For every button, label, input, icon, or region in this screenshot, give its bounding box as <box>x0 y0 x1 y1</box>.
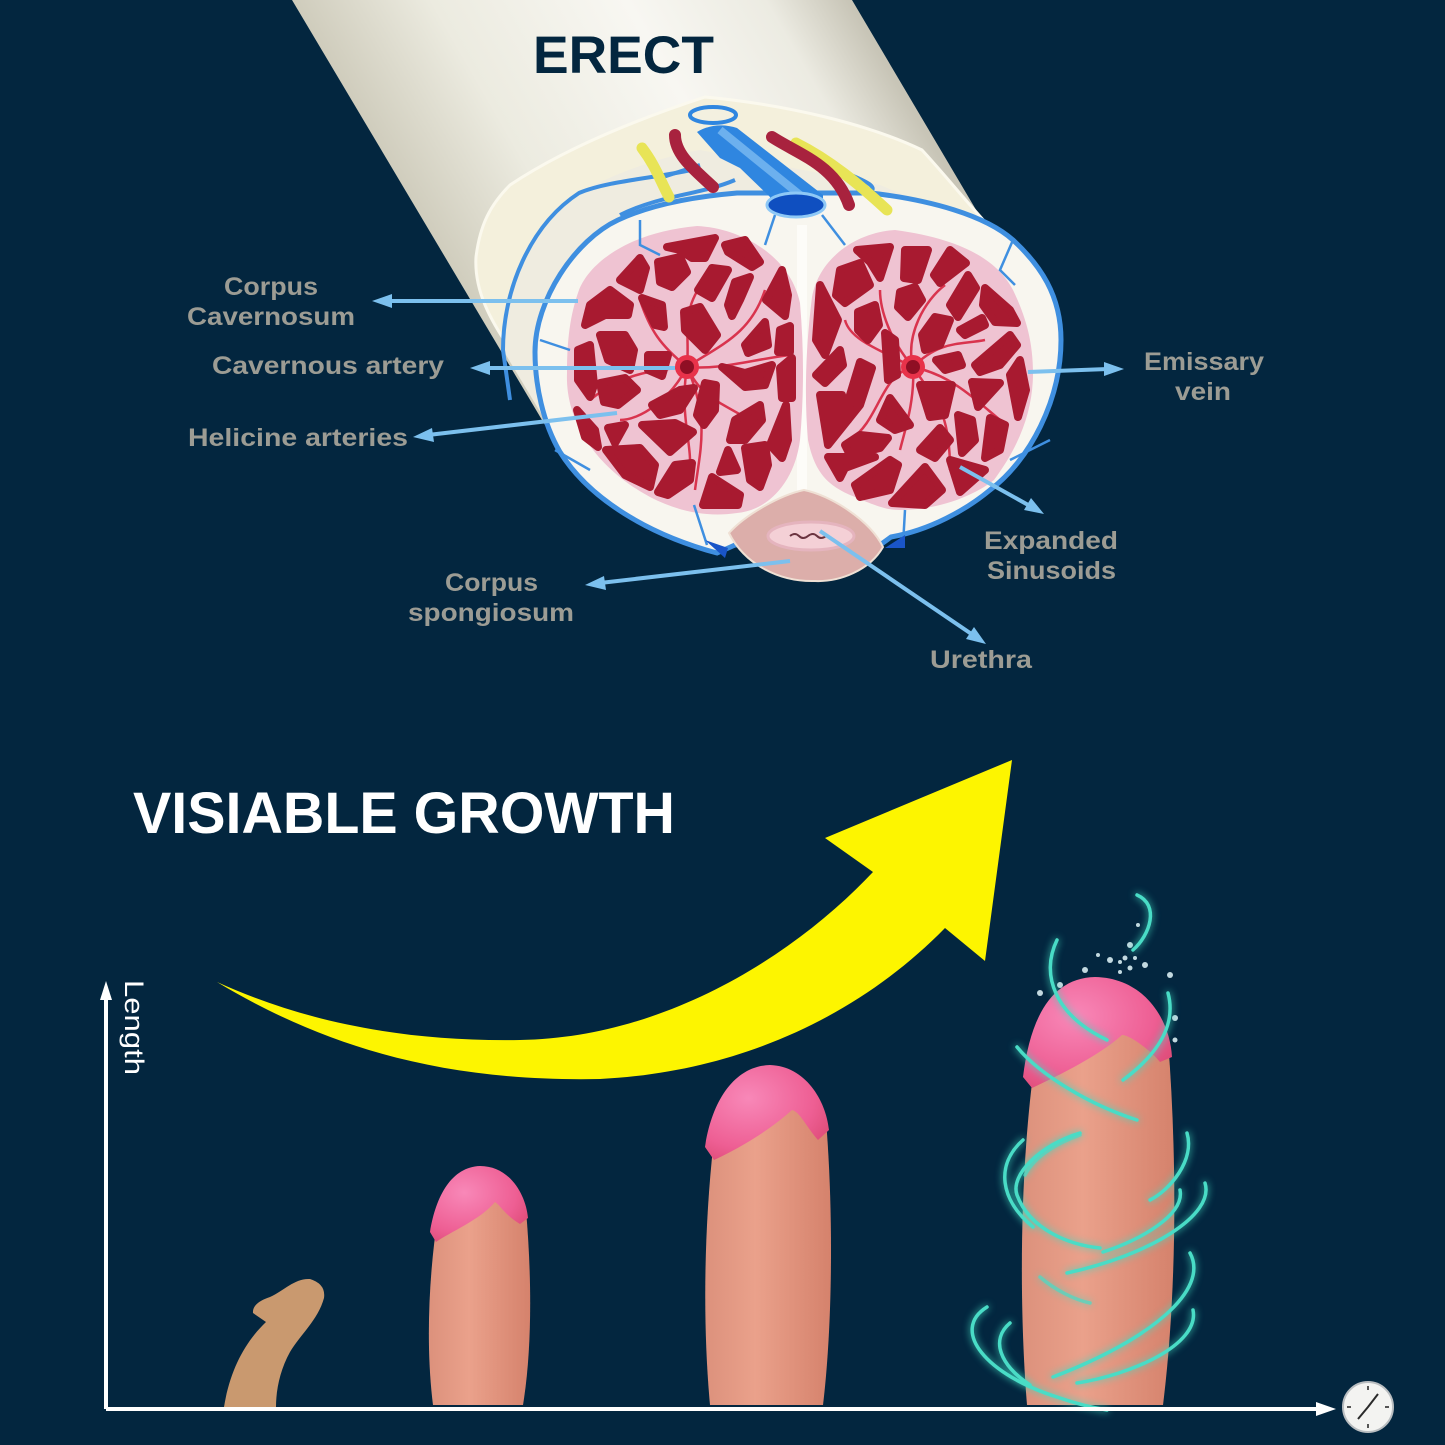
label: Emissary vein <box>1144 348 1264 406</box>
arrow: Emissary vein <box>1028 362 1124 376</box>
illustration: anatomical cross-section <box>476 97 1061 581</box>
label: Helicine arteries: Helicine arteries <box>188 424 408 452</box>
icon: clock <box>1343 1382 1393 1432</box>
arrow: Corpus Cavernosum <box>372 294 578 308</box>
label: Corpus spongiosum: Corpus <box>445 569 538 597</box>
corpus cavernosum right <box>806 230 1033 510</box>
chart axes <box>100 981 1336 1416</box>
water splash <box>1037 923 1178 1042</box>
label: Corpus Cavernosum <box>187 273 355 331</box>
outer skin layer <box>476 97 986 420</box>
label: Emissary vein: vein <box>1175 378 1231 406</box>
label: Corpus spongiosum <box>408 569 574 627</box>
label: Corpus Cavernosum: Cavernosum <box>187 303 355 331</box>
arrow: Expanded Sinusoids <box>960 467 1044 514</box>
label: Emissary vein: Emissary <box>1144 348 1264 376</box>
dorsal arteries <box>675 135 849 205</box>
outer dorsal vein branch <box>503 168 700 400</box>
axis label: Length: Length <box>119 980 149 1075</box>
arrow: yellow growth curve <box>217 760 1012 1079</box>
small connecting veins <box>540 215 1050 545</box>
label: Urethra: Urethra <box>930 646 1033 674</box>
label: Corpus spongiosum: spongiosum <box>408 599 574 627</box>
corpus spongiosum <box>729 490 883 581</box>
shaft <box>429 1190 530 1405</box>
bulbourethral veins <box>705 535 905 558</box>
shaft <box>1022 1015 1174 1405</box>
dorsal veins branches <box>620 165 873 215</box>
label: Corpus Cavernosum: Corpus <box>224 273 318 301</box>
stage 2 figure <box>429 1166 530 1405</box>
stage 4 figure <box>972 895 1206 1410</box>
label: Expanded Sinusoids: Expanded <box>984 527 1118 555</box>
shaft <box>705 1095 831 1405</box>
deep dorsal vein <box>697 125 823 205</box>
arrow: Urethra <box>820 531 986 644</box>
title: ERECT: ERECT <box>533 26 714 85</box>
head <box>1023 977 1172 1088</box>
dorsal nerves <box>642 143 887 210</box>
head <box>430 1166 528 1242</box>
arrow: Cavernous artery <box>470 361 675 375</box>
head <box>705 1065 829 1160</box>
illustration: penis shaft cylinder backdrop <box>292 0 985 425</box>
stage 1 figure <box>224 1279 324 1407</box>
arrow: Helicine arteries <box>413 413 617 442</box>
corpus cavernosum left <box>567 226 803 515</box>
septum between chambers <box>797 225 807 500</box>
swirl lines <box>972 895 1206 1410</box>
urethra <box>768 522 854 550</box>
arrow: Corpus spongiosum <box>585 561 790 590</box>
heading: VISIABLE GROWTH: VISIABLE GROWTH <box>133 781 675 846</box>
white tunica <box>535 193 1061 553</box>
stage 3 figure <box>705 1065 831 1405</box>
label: Expanded Sinusoids: Sinusoids <box>987 557 1116 585</box>
inner fascia region <box>503 150 1013 420</box>
label: Expanded Sinusoids <box>984 527 1118 585</box>
label: Cavernous artery: Cavernous artery <box>212 352 444 380</box>
